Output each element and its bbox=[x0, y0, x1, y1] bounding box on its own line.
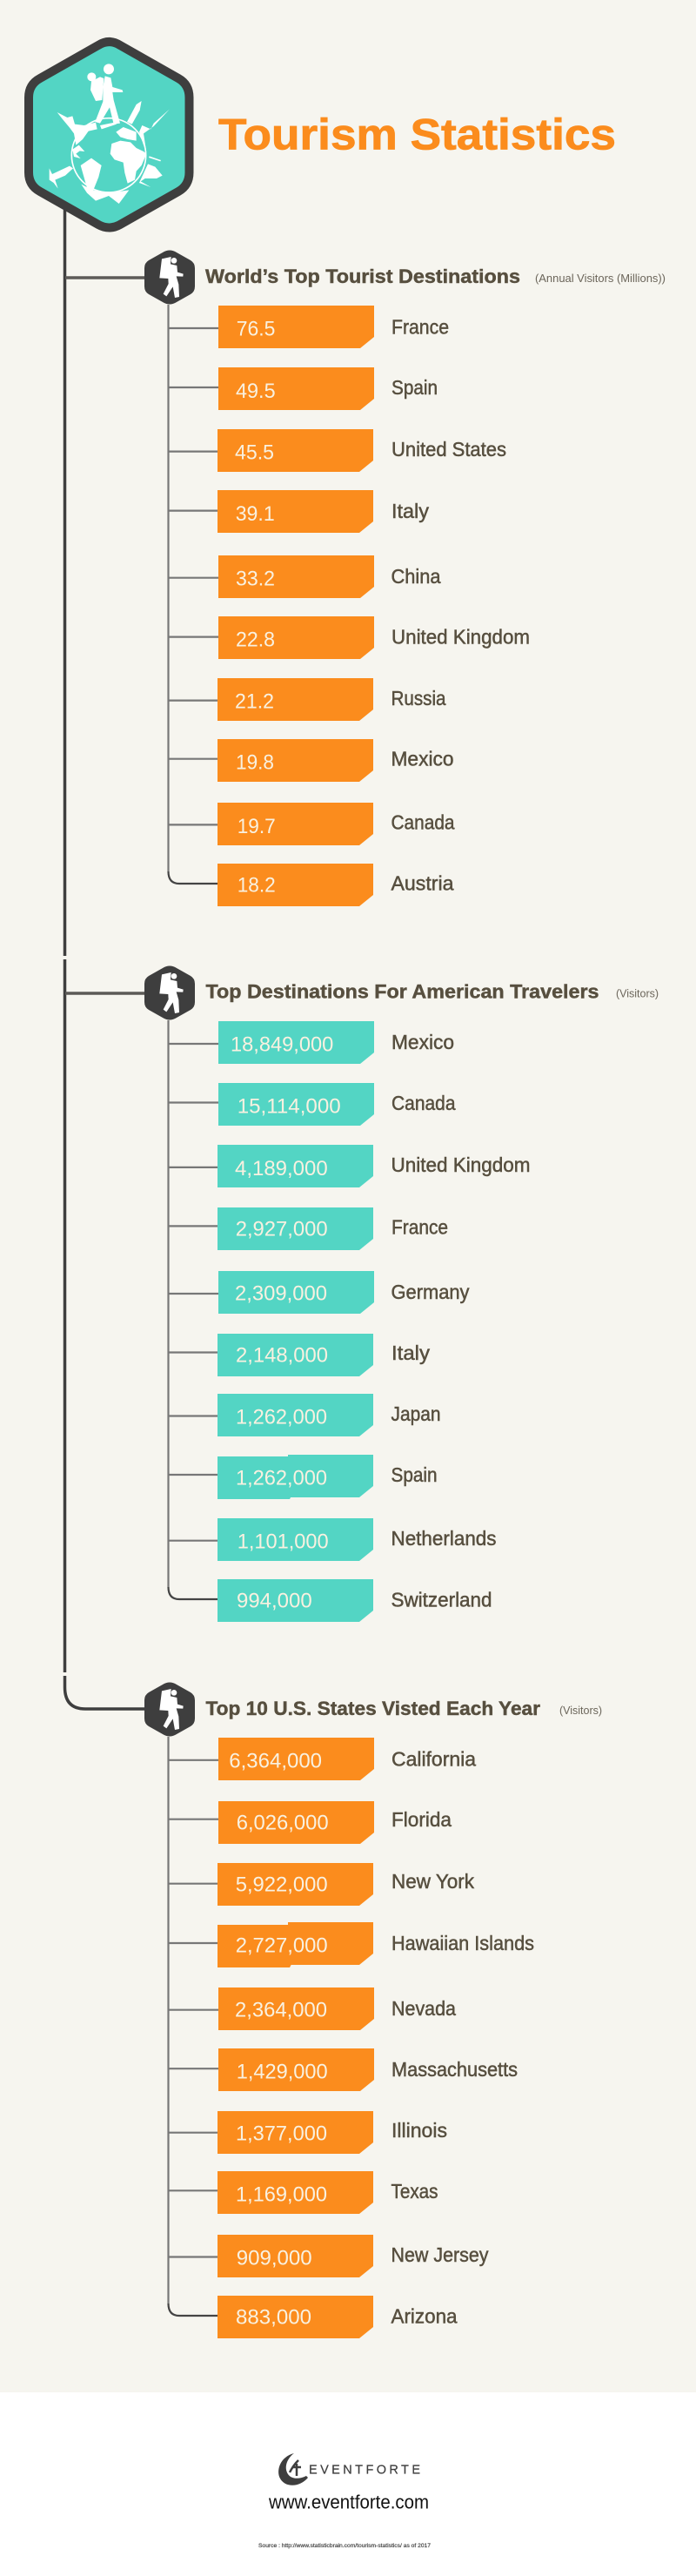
row: France bbox=[169, 1207, 448, 1250]
row: Arizona: 883,000 bbox=[236, 2306, 311, 2330]
row: Switzerland: 994,000 bbox=[237, 1590, 312, 1613]
row: Switzerland: Switzerland bbox=[392, 1588, 492, 1611]
icon: main hexagon with traveler on globe bbox=[29, 42, 190, 228]
row: Florida: 6,026,000 bbox=[237, 1812, 329, 1835]
row: Netherlands: 1,101,000 bbox=[238, 1530, 329, 1554]
row: Italy bbox=[169, 1334, 430, 1376]
row: Hawaiian Islands bbox=[169, 1922, 534, 1967]
row: France bbox=[169, 306, 449, 348]
row: United States: 45.5 bbox=[235, 441, 274, 464]
row: Illinois bbox=[169, 2111, 447, 2154]
panel: world's top tourist destinations bbox=[144, 251, 666, 906]
row: Russia: 21.2 bbox=[235, 689, 274, 713]
row: Spain: 1,262,000 bbox=[236, 1467, 327, 1490]
row: Italy bbox=[169, 490, 429, 533]
row: Canada: Canada bbox=[392, 1092, 456, 1114]
row: United Kingdom: 4,189,000 bbox=[235, 1157, 328, 1180]
row: United Kingdom bbox=[169, 1145, 531, 1187]
row: United States bbox=[169, 429, 506, 472]
section heading: World’s Top Tourist Destinations bbox=[205, 266, 520, 287]
section unit note: (Annual Visitors (Millions)) bbox=[535, 272, 666, 285]
panel: top 10 U.S. states bbox=[144, 1682, 602, 2338]
row: California: California bbox=[392, 1748, 477, 1771]
row: Spain: Spain bbox=[392, 376, 438, 399]
section heading: Top 10 U.S. States Visted Each Year bbox=[205, 1698, 540, 1719]
row: Germany: 2,309,000 bbox=[235, 1282, 327, 1306]
section heading: Top Destinations For American Travelers bbox=[205, 981, 599, 1003]
row: California bbox=[169, 1738, 477, 1780]
branch line bbox=[167, 305, 170, 871]
row: Nevada: Nevada bbox=[392, 1997, 457, 2020]
row: Germany bbox=[169, 1271, 470, 1314]
row: Illinois: Illinois bbox=[392, 2119, 447, 2142]
row: Mexico: Mexico bbox=[392, 748, 454, 770]
row: United Kingdom: United Kingdom bbox=[392, 626, 530, 649]
row: United Kingdom: United Kingdom bbox=[392, 1153, 531, 1176]
footer logo bbox=[278, 2453, 420, 2485]
row: United Kingdom: 22.8 bbox=[236, 629, 275, 652]
source note: Source : http://www.statisticbrain.com/tourism-statistics/ as of 2017 bbox=[258, 2543, 431, 2549]
section unit note: (Visitors) bbox=[616, 987, 659, 1000]
row: China bbox=[169, 555, 441, 598]
row: Austria bbox=[169, 864, 454, 906]
row: Spain: 49.5 bbox=[236, 380, 276, 403]
row: Mexico: 18,849,000 bbox=[231, 1033, 333, 1057]
row: Mexico bbox=[169, 739, 454, 782]
row: Russia: Russia bbox=[392, 687, 446, 710]
row: Japan: Japan bbox=[392, 1402, 440, 1425]
row: Canada: Canada bbox=[392, 811, 455, 834]
branch line bbox=[167, 1737, 170, 2304]
row: Hawaiian Islands: 2,727,000 bbox=[236, 1934, 328, 1958]
row: United Kingdom bbox=[169, 616, 530, 659]
row: Spain: Spain bbox=[392, 1463, 437, 1486]
row: Hawaiian Islands: Hawaiian Islands bbox=[392, 1932, 534, 1954]
row: Russia bbox=[169, 678, 446, 721]
row: Netherlands: Netherlands bbox=[392, 1527, 496, 1550]
row: Italy: 2,148,000 bbox=[236, 1344, 328, 1367]
section icon: backpacker hexagon bbox=[144, 1682, 195, 1736]
row: United States: United States bbox=[392, 438, 506, 461]
row: Arizona bbox=[169, 2296, 458, 2338]
row: Mexico: Mexico bbox=[392, 1031, 454, 1053]
row: Florida: Florida bbox=[392, 1808, 452, 1831]
footer logo: EVENTFORTE bbox=[309, 2464, 420, 2478]
row: Florida bbox=[169, 1801, 452, 1844]
section icon: backpacker hexagon bbox=[144, 251, 195, 305]
row: Canada bbox=[169, 803, 455, 845]
row: Massachusetts: 1,429,000 bbox=[237, 2061, 328, 2084]
row: Mexico: 19.8 bbox=[236, 751, 274, 775]
row: China: 33.2 bbox=[236, 568, 275, 591]
section unit note: (Visitors) bbox=[559, 1704, 602, 1717]
row: France: 2,927,000 bbox=[236, 1217, 328, 1241]
row: Japan bbox=[169, 1394, 440, 1436]
row: Arizona: Arizona bbox=[392, 2305, 458, 2328]
row: Canada: 15,114,000 bbox=[238, 1095, 341, 1119]
row: Texas bbox=[169, 2171, 438, 2214]
row: Mexico bbox=[169, 1021, 454, 1064]
row: Texas: 1,169,000 bbox=[236, 2183, 327, 2207]
row: Texas: Texas bbox=[392, 2180, 438, 2203]
row: California: 6,364,000 bbox=[229, 1750, 322, 1773]
panel: top destinations for american travelers bbox=[144, 966, 659, 1622]
row: France: France bbox=[392, 315, 449, 338]
footer website: www.eventforte.com bbox=[268, 2492, 429, 2513]
row: Austria: Austria bbox=[392, 872, 454, 895]
row: Spain bbox=[169, 367, 438, 410]
row: Massachusetts: Massachusetts bbox=[392, 2058, 518, 2081]
section icon: backpacker hexagon bbox=[144, 966, 195, 1020]
branch line bbox=[167, 1020, 170, 1587]
row: Canada: 19.7 bbox=[238, 815, 276, 838]
row: New York: 5,922,000 bbox=[236, 1873, 328, 1896]
row: New Jersey bbox=[169, 2235, 489, 2277]
row: Italy: Italy bbox=[392, 1342, 430, 1364]
row: Austria: 18.2 bbox=[238, 874, 276, 898]
row: China: China bbox=[392, 565, 441, 588]
row: Illinois: 1,377,000 bbox=[236, 2122, 327, 2145]
row: New Jersey: New Jersey bbox=[392, 2243, 489, 2266]
row: Massachusetts bbox=[169, 2048, 518, 2091]
row: France: 76.5 bbox=[237, 317, 275, 341]
row: Switzerland bbox=[169, 1579, 492, 1622]
row: Italy: Italy bbox=[392, 500, 429, 522]
row: Canada bbox=[169, 1083, 456, 1126]
main timeline line bbox=[64, 196, 144, 1709]
title: Tourism Statistics bbox=[218, 110, 616, 158]
row: Netherlands bbox=[169, 1518, 496, 1561]
row: New York: New York bbox=[392, 1870, 474, 1893]
row: Spain bbox=[169, 1455, 437, 1499]
row: Italy: 39.1 bbox=[236, 502, 275, 526]
row: Nevada: 2,364,000 bbox=[235, 1999, 327, 2021]
row: New Jersey: 909,000 bbox=[237, 2247, 312, 2270]
row: New York bbox=[169, 1863, 474, 1906]
row: Nevada bbox=[169, 1987, 457, 2030]
row: Germany: Germany bbox=[392, 1281, 470, 1303]
row: France: France bbox=[392, 1215, 448, 1238]
row: Japan: 1,262,000 bbox=[236, 1406, 327, 1429]
